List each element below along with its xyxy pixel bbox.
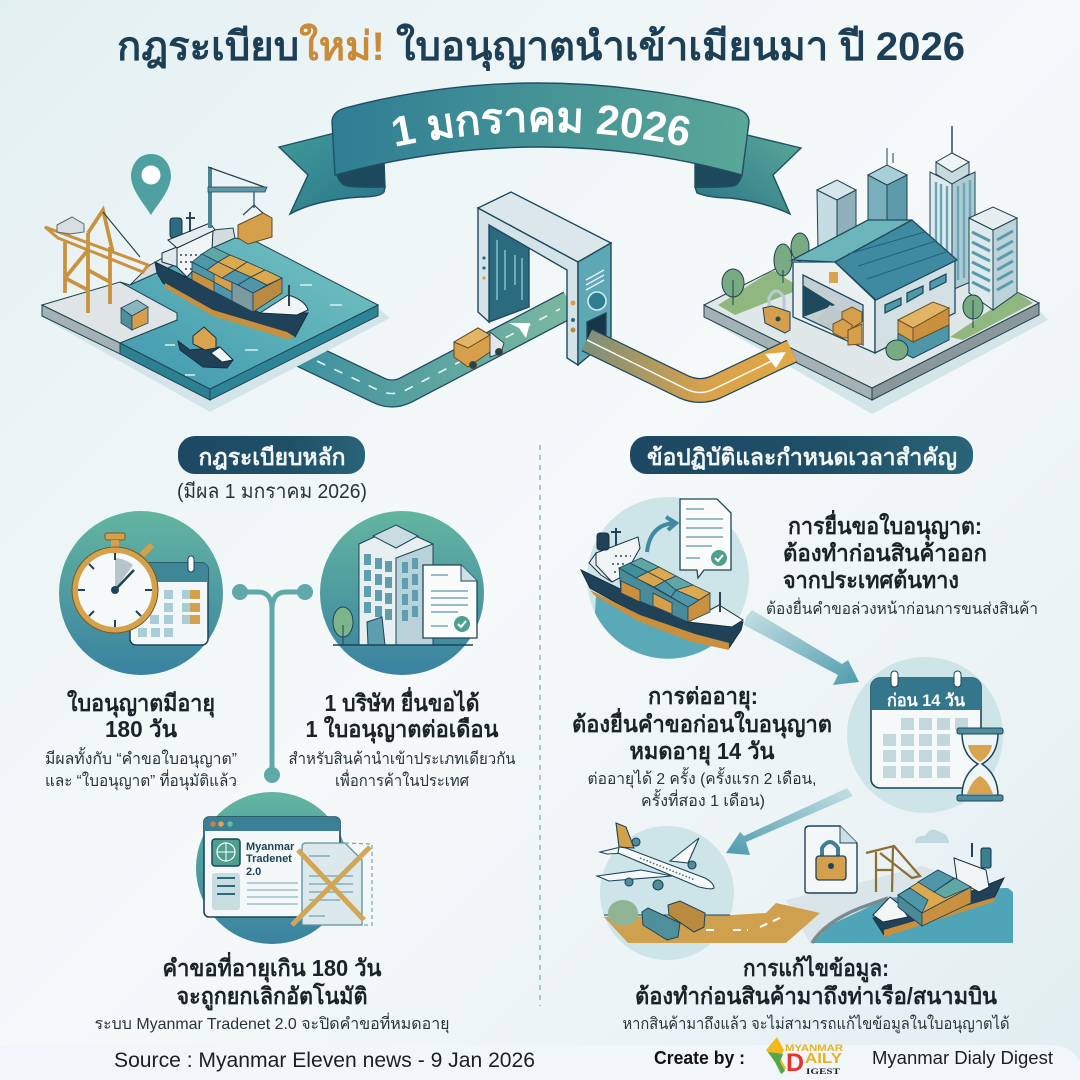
icon: port scene with ship <box>812 830 1013 943</box>
trees <box>722 233 983 328</box>
rule text: auto cancellation: คำขอที่อายุเกิน 180 วัน <box>162 951 382 983</box>
connector line <box>232 584 313 783</box>
rule text: one licence per month: 1 บริษัท ยื่นขอได้ <box>324 686 480 716</box>
heading pill: main rules: กฎระเบียบหลัก <box>198 444 346 470</box>
port crane <box>866 846 920 892</box>
illustration: port with cargo ship <box>42 167 390 412</box>
logo: Myanmar Daily Digest: MYANMAR <box>785 1043 843 1054</box>
icon: ship and document <box>581 497 749 659</box>
rule text: one licence per month: สำหรับสินค้านำเข้าประเภทเดียวกัน <box>288 750 516 768</box>
icon: locked document <box>805 826 857 893</box>
rule text: 180 day licence: 180 วัน <box>105 716 177 742</box>
dock container <box>121 300 148 330</box>
illustration: warehouse and city <box>704 126 1048 414</box>
illustration: customs gate <box>478 192 611 365</box>
rule text: 180 day licence: และ “ใบอนุญาต” ที่อนุมัติแล้ว <box>45 769 237 791</box>
rule text: auto cancellation: จะถูกยกเลิกอัตโนมัติ <box>176 982 368 1011</box>
window label: Myanmar <box>246 841 295 853</box>
step text: correcting data <box>622 954 1010 1034</box>
footer <box>0 1037 1080 1080</box>
panel: main rules <box>45 436 516 1034</box>
cargo ship <box>873 843 1004 937</box>
title: กฎระเบียบใหม่! ใบอนุญาตนำเข้าเมียนมา ปี 2026 <box>117 23 965 72</box>
window label: Tradenet <box>246 853 292 865</box>
step text: correcting data: หากสินค้ามาถึงแล้ว จะไม่สามารถแก้ไขข้อมูลในใบอนุญาตได้ <box>622 1014 1010 1034</box>
rule text: one licence per month: เพื่อการค้าในประเทศ <box>335 769 469 790</box>
rule text: 180 day licence: มีผลทั้งกับ “คำขอใบอนุญาต” <box>45 747 237 769</box>
truck <box>454 328 504 368</box>
step text: applying for a licence: ต้องยื่นคำขอล่วงหน้าก่อนการขนส่งสินค้า <box>766 597 1038 618</box>
heading pill: main rules <box>178 436 365 474</box>
airplane <box>597 823 714 890</box>
effective date note: (มีผล 1 มกราคม 2026) <box>177 481 367 503</box>
icon: stopwatch and calendar <box>59 511 223 675</box>
illustration: teal road with truck <box>290 304 570 394</box>
heading pill: compliance: ข้อปฏิบัติและกำหนดเวลาสำคัญ <box>647 444 957 471</box>
logo: Myanmar Daily Digest: AILY <box>805 1050 842 1067</box>
water ripples <box>165 285 342 375</box>
arrow: ship to calendar <box>744 610 859 685</box>
road arrow <box>509 323 530 338</box>
heading pill: compliance <box>630 436 973 474</box>
divider <box>539 445 541 1006</box>
creator name: Myanmar Dialy Digest <box>872 1048 1053 1068</box>
warehouse platform <box>704 220 1039 400</box>
panel: compliance and key deadlines <box>572 436 1038 1034</box>
step text: extending a licence: ต้องยื่นคำขอก่อนใบอนุญาต <box>572 707 832 739</box>
banner date text: 1 มกราคม 2026 <box>392 105 690 146</box>
rule text: 180 day licence <box>45 689 237 791</box>
step text: extending a licence: การต่ออายุ: <box>648 683 758 711</box>
icon: Myanmar Tradenet window and cancelled document <box>196 792 372 944</box>
icon: calendar and hourglass <box>847 657 1003 813</box>
bush <box>886 340 908 360</box>
port platform <box>42 228 378 400</box>
icon: plane, road and containers <box>597 823 1005 960</box>
warehouse building <box>792 220 957 353</box>
step text: applying for a licence: จากประเทศต้นทาง <box>783 567 959 593</box>
small boat <box>178 327 233 368</box>
containers <box>192 247 282 312</box>
window label: 2.0 <box>246 866 261 878</box>
rule text: one licence per month <box>288 686 516 790</box>
calendar label: ก่อน 14 วัน <box>887 691 965 710</box>
city towers <box>817 126 1017 310</box>
logo: Myanmar Daily Digest: D <box>786 1049 804 1077</box>
step text: correcting data: ต้องทำก่อนสินค้ามาถึงท่าเรือ/สนามบิน <box>635 983 997 1009</box>
hoist crane with hanging container <box>208 167 272 244</box>
creator label: Create by : <box>654 1048 745 1068</box>
step text: extending a licence <box>572 683 832 810</box>
rule text: auto cancellation: ระบบ Myanmar Tradenet 2.0 จะปิดคำขอที่หมดอายุ <box>94 1012 450 1034</box>
step text: correcting data: การแก้ไขข้อมูล: <box>743 954 889 983</box>
step text: extending a licence: ครั้งที่สอง 1 เดือน) <box>641 789 765 810</box>
source credit: Source : Myanmar Eleven news - 9 Jan 2026 <box>114 1049 535 1072</box>
step text: extending a licence: ต่ออายุได้ 2 ครั้ง (ครั้งแรก 2 เดือน, <box>588 767 816 789</box>
dock crane <box>45 210 148 313</box>
step text: extending a licence: หมดอายุ 14 วัน <box>630 738 775 766</box>
step text: applying for a licence: การยื่นขอใบอนุญาต: <box>788 509 982 541</box>
rule text: 180 day licence: ใบอนุญาตมีอายุ <box>67 689 215 718</box>
cargo boxes and container <box>833 302 949 358</box>
icon: location pin <box>131 154 171 215</box>
hourglass <box>957 728 1003 801</box>
rule text: one licence per month: 1 ใบอนุญาตต่อเดือน <box>306 715 499 744</box>
icon: office building and approved document <box>320 511 484 675</box>
container ship <box>155 212 308 339</box>
rule text: auto cancellation <box>94 951 450 1034</box>
logo: Myanmar Daily Digest <box>766 1037 843 1077</box>
arrow: calendar to plane <box>726 788 853 855</box>
logo: Myanmar Daily Digest: IGEST <box>806 1066 840 1076</box>
step text: applying for a licence <box>766 509 1038 618</box>
date ribbon banner <box>278 82 802 216</box>
padlock <box>763 291 790 333</box>
illustration: orange road with arrow <box>587 340 792 392</box>
cargo ship <box>581 528 743 650</box>
step text: applying for a licence: ต้องทำก่อนสินค้าออก <box>783 540 987 566</box>
